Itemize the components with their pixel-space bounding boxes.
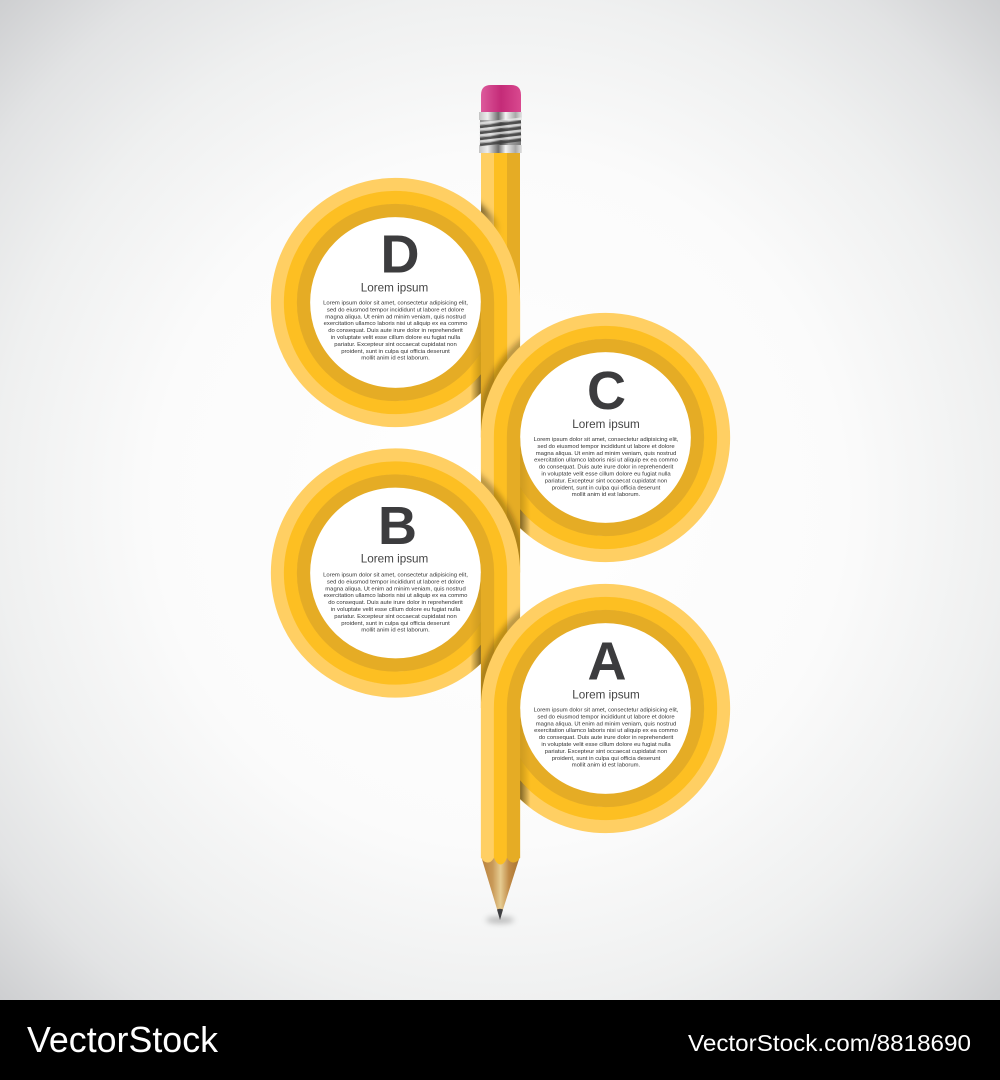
- eraser: [481, 85, 521, 113]
- text block A: proident, sunt in culpa qui officia deserunt: [552, 756, 661, 762]
- text block C: do consequat. Duis aute irure dolor in reprehenderit: [539, 465, 674, 471]
- text block A: magna aliqua. Ut enim ad minim veniam, quis nostrud: [536, 721, 676, 727]
- shadow of ring C on shaft: [481, 336, 520, 430]
- text block D: proident, sunt in culpa qui officia deserunt: [341, 349, 450, 355]
- graphite lead: [497, 909, 503, 920]
- text block C: magna aliqua. Ut enim ad minim veniam, quis nostrud: [536, 451, 676, 457]
- text block B: do consequat. Duis aute irure dolor in reprehenderit: [328, 600, 463, 606]
- metal ferrule: [479, 112, 522, 153]
- text block B: sed do eiusmod tempor incididunt ut labore et dolore: [327, 579, 465, 585]
- text block C: Lorem ipsum dolor sit amet, consectetur adipisicing elit,: [534, 437, 679, 443]
- text block D: do consequat. Duis aute irure dolor in reprehenderit: [328, 328, 463, 334]
- text block B: pariatur. Excepteur sint occaecat cupidatat non: [334, 614, 457, 620]
- text block D: Lorem ipsum dolor sit amet, consectetur adipisicing elit,: [323, 300, 468, 306]
- shadow of ring A on shaft: [481, 606, 520, 701]
- white disc D: [310, 216, 482, 388]
- footer brand: VectorStock: [27, 1019, 219, 1060]
- white disc B: [310, 487, 482, 659]
- text block A: mollit anim id est laborum.: [572, 763, 641, 769]
- text block D: exercitation ullamco laboris nisi ut aliquip ex ea commo: [324, 321, 468, 327]
- text block B: exercitation ullamco laboris nisi ut aliquip ex ea commo: [324, 593, 468, 599]
- white disc C: [520, 352, 692, 524]
- text block A: in voluptate velit esse cillum dolore eu fugiat nulla: [541, 742, 671, 748]
- text block A: sed do eiusmod tempor incididunt ut labore et dolore: [537, 714, 675, 720]
- text block D: sed do eiusmod tempor incididunt ut labore et dolore: [327, 307, 465, 313]
- text block C: sed do eiusmod tempor incididunt ut labore et dolore: [537, 444, 675, 450]
- ring D: [278, 184, 514, 438]
- text block C: mollit anim id est laborum.: [572, 492, 641, 498]
- ring D arc and vertical: [278, 184, 514, 438]
- ring B: [270, 447, 522, 708]
- ring A arc and pencil lower shaft: [481, 590, 724, 864]
- heading B: Lorem ipsum: [361, 552, 428, 566]
- pencil upper shaft: [481, 153, 520, 296]
- heading D: Lorem ipsum: [361, 282, 428, 294]
- letter D: D: [380, 224, 420, 284]
- letter B: B: [378, 496, 417, 556]
- ring D tail: [270, 302, 481, 428]
- text block C: pariatur. Excepteur sint occaecat cupidatat non: [545, 478, 667, 484]
- pencil eraser and ferrule: [479, 85, 522, 153]
- text block D: mollit anim id est laborum.: [361, 356, 430, 362]
- ring A tail: [520, 708, 730, 834]
- heading A: Lorem ipsum: [572, 688, 640, 702]
- text block B: magna aliqua. Ut enim ad minim veniam, quis nostrud: [325, 586, 466, 592]
- ring A: [480, 582, 732, 864]
- text block A: do consequat. Duis aute irure dolor in reprehenderit: [539, 735, 674, 741]
- footer bar: [0, 1000, 1000, 1080]
- heading C: Lorem ipsum: [572, 418, 640, 431]
- wood cone: [481, 856, 520, 919]
- shadow of ring B on shaft: [481, 471, 520, 566]
- text block D: magna aliqua. Ut enim ad minim veniam, quis nostrud: [325, 314, 466, 320]
- text block D: pariatur. Excepteur sint occaecat cupidatat non: [334, 342, 457, 348]
- text block C: exercitation ullamco laboris nisi ut aliquip ex ea commo: [534, 458, 679, 464]
- letter A: A: [588, 632, 626, 692]
- pencil tip: [481, 856, 520, 920]
- ring B tail: [270, 573, 481, 698]
- text block D: in voluptate velit esse cillum dolore eu fugiat nulla: [331, 335, 461, 341]
- text block C: in voluptate velit esse cillum dolore eu fugiat nulla: [541, 472, 671, 478]
- ring B arc and vertical: [278, 455, 514, 708]
- text block A: exercitation ullamco laboris nisi ut aliquip ex ea commo: [534, 728, 679, 734]
- text block B: in voluptate velit esse cillum dolore eu fugiat nulla: [331, 607, 461, 613]
- ring C: [480, 312, 732, 572]
- text block B: Lorem ipsum dolor sit amet, consectetur adipisicing elit,: [323, 572, 468, 578]
- text block A: Lorem ipsum dolor sit amet, consectetur adipisicing elit,: [534, 708, 679, 714]
- ring C tail: [520, 438, 730, 562]
- letter C: C: [587, 361, 626, 421]
- pencil tip shadow: [486, 916, 514, 924]
- text block B: mollit anim id est laborum.: [361, 628, 430, 634]
- footer image id: VectorStock.com/8818690: [688, 1030, 971, 1056]
- ring C arc and vertical: [488, 320, 724, 572]
- white disc A: [520, 622, 692, 794]
- text block A: pariatur. Excepteur sint occaecat cupidatat non: [545, 749, 667, 755]
- shadow from ring D on shaft: [481, 200, 500, 232]
- text block C: proident, sunt in culpa qui officia deserunt: [552, 485, 661, 491]
- text block B: proident, sunt in culpa qui officia deserunt: [341, 621, 450, 627]
